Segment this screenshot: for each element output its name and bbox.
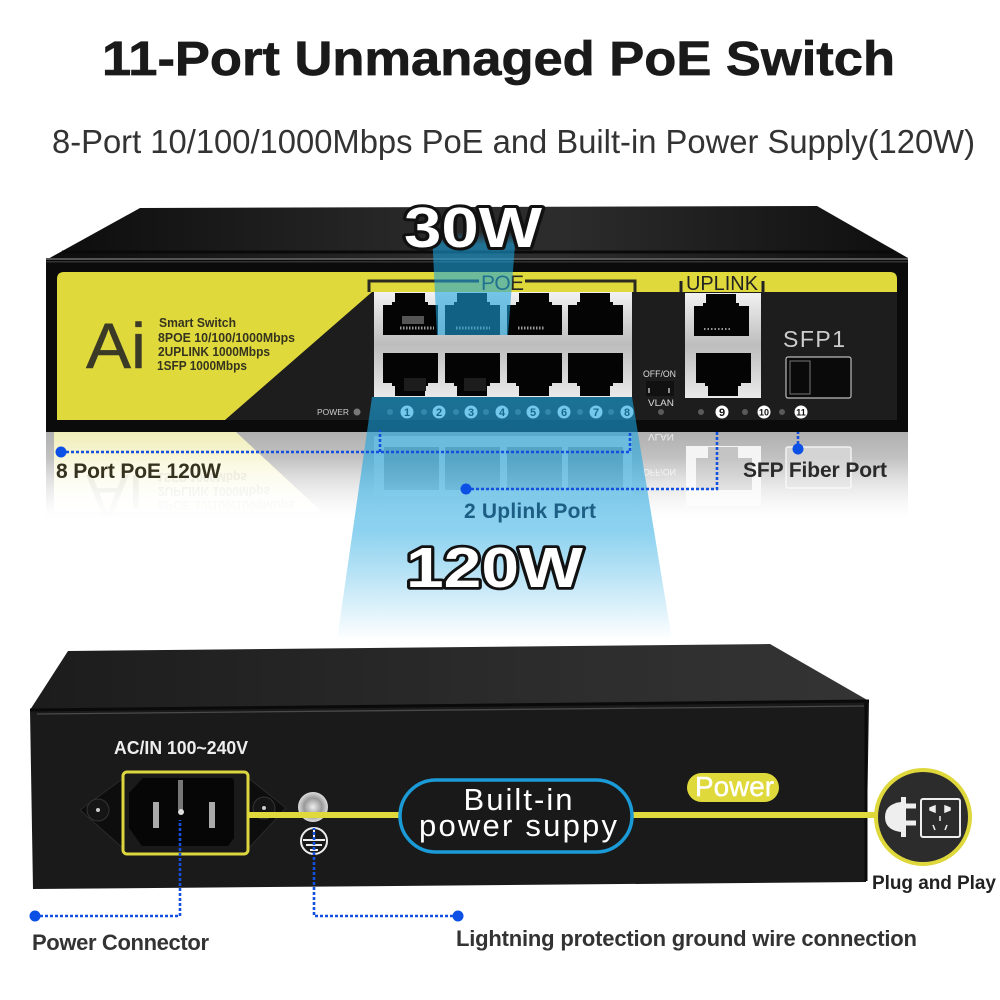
status LEDs (387, 409, 785, 415)
brand Ai: Ai (86, 310, 146, 382)
spec text: 8POE 10/100/1000Mbps (158, 330, 295, 345)
callout: power connector: Power Connector (32, 930, 209, 955)
callout: ground wire: Lightning protection ground wire connection (456, 926, 917, 951)
port numbers: 11 (796, 408, 806, 418)
built-in power supply pill: power suppy (419, 808, 618, 843)
spec text: 1SFP 1000Mbps (157, 358, 247, 373)
plug and play label: Plug and Play (872, 873, 996, 894)
power indicator: POWER (317, 407, 349, 417)
callout: SFP fiber port: SFP Fiber Port (743, 459, 887, 482)
spec text: 2UPLINK 1000Mbps (158, 344, 270, 359)
port numbers: 9 (719, 407, 725, 419)
port numbers: 10 (759, 408, 769, 418)
ground screw (298, 792, 328, 822)
port numbers: 6 (561, 407, 567, 419)
callout: 2 uplink port (460, 432, 717, 523)
port numbers: 5 (530, 407, 536, 419)
rear switch (30, 644, 876, 889)
callout: 8 port PoE: 8 Port PoE 120W (56, 460, 221, 483)
UPLINK bracket label: UPLINK (686, 273, 759, 295)
voltage label: AC/IN 100~240V (114, 738, 248, 758)
ground symbol (301, 828, 327, 854)
rear face (30, 701, 869, 889)
port numbers: 8 (624, 407, 630, 419)
callout: ground wire (314, 828, 917, 951)
reflection of front switch (40, 431, 920, 533)
POE bracket label: POE (481, 272, 524, 295)
SFP port (783, 326, 851, 398)
reflection of front switch: 1SFP 1000Mbps (157, 470, 247, 485)
reflection of front switch: OFF/ON (643, 466, 676, 477)
subtitle: 8-Port 10/100/1000Mbps PoE and Built-in Power Supply(120W) (52, 123, 975, 160)
port numbers: 4 (499, 407, 506, 419)
port numbers: 2 (436, 407, 442, 419)
spec text (157, 315, 295, 373)
reflection of front switch: Ai (86, 461, 143, 533)
port numbers: 3 (468, 407, 474, 419)
yellow power line (248, 812, 876, 818)
POE bracket label (369, 272, 635, 295)
VLAN switch: VLAN (648, 398, 674, 409)
30W beam (432, 232, 516, 335)
power socket (80, 772, 286, 854)
reflection of front switch: VLAN (648, 431, 674, 442)
VLAN switch: OFF/ON (643, 369, 676, 380)
rear top face (30, 644, 869, 710)
icon: plug and socket (876, 770, 970, 864)
120W beam (337, 397, 672, 640)
front switch (46, 206, 908, 432)
reflection of front switch: 2UPLINK 1000Mbps (158, 484, 270, 499)
port numbers: 7 (593, 407, 599, 419)
SFP port: SFP1 (783, 326, 845, 352)
title: 11-Port Unmanaged PoE Switch (102, 33, 895, 86)
port numbers: 1 (404, 407, 410, 419)
spec text: Smart Switch (159, 315, 236, 330)
VLAN switch (643, 369, 676, 409)
dark textured panel (225, 292, 897, 420)
built-in power supply pill (400, 780, 632, 852)
30W label: 30W (404, 196, 542, 260)
callout: SFP fiber port (743, 432, 887, 482)
switch top face (46, 206, 908, 260)
callout: 2 uplink port: 2 Uplink Port (464, 500, 596, 523)
reflection of front switch: 8POE 10/100/1000Mbps (158, 498, 295, 513)
yellow label panel (57, 272, 897, 420)
switch front face (46, 258, 908, 432)
callout: 8 port PoE (56, 430, 630, 483)
port numbers (400, 406, 808, 419)
uplink ports (685, 293, 761, 398)
power tag: Power (695, 771, 774, 802)
120W label: 120W (406, 536, 583, 600)
POE port block (374, 292, 632, 397)
callout: power connector (30, 820, 209, 955)
built-in power supply pill: Built-in (464, 782, 572, 817)
